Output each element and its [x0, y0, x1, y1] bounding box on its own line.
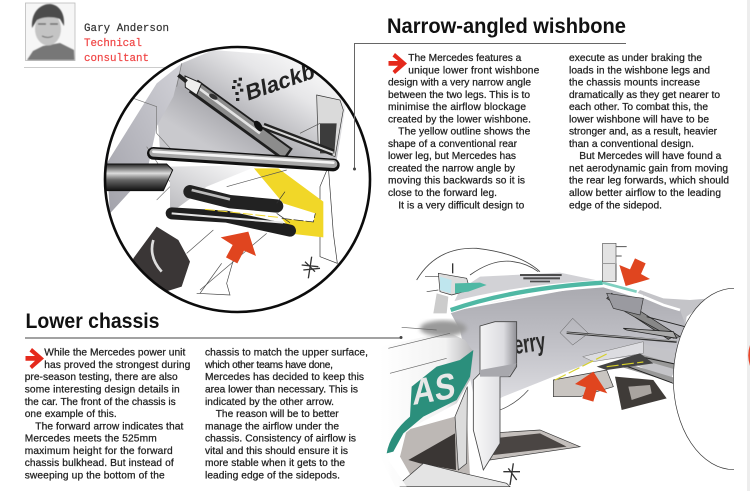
- text: wishbone article: execute as under braking the: [569, 53, 702, 64]
- text: wishbone article: created by the lower wishbone.: [388, 114, 531, 125]
- sponsor: erry: [512, 326, 548, 360]
- text: lower chassis article: Mercedes meets the 525mm: [25, 434, 157, 445]
- circular wishbone detail illustration: [100, 44, 371, 312]
- red arrow: [221, 232, 256, 263]
- text: wishbone article: the rear leg forwards, which should: [569, 176, 729, 187]
- text: lower chassis article: chassis bulkhead. But instead of: [25, 458, 174, 469]
- text: wishbone article: lower wishbone will have to be: [569, 114, 709, 125]
- cylinder: [100, 164, 173, 191]
- text: wishbone article: unique lower front wishbone: [408, 65, 540, 76]
- icon: red arrow: [26, 348, 44, 369]
- floor panel outline: [583, 342, 643, 362]
- text: wishbone article: between the two legs. This is to: [388, 90, 530, 101]
- text: lower chassis article: leading edge of the sidepods.: [205, 470, 340, 481]
- text: wishbone article: edge of the sidepod.: [569, 200, 662, 211]
- signature: [503, 463, 520, 485]
- text: wishbone article: than a conventional design.: [569, 139, 694, 150]
- upper wishbone legs: [263, 126, 333, 153]
- text: lower chassis article: which other teams have done,: [204, 360, 333, 371]
- heading: Narrow-angled wishbone: Narrow-angled wishbone: [387, 15, 626, 38]
- yellow outline shape: [254, 168, 323, 237]
- horizontal upper tube: [153, 153, 333, 165]
- text: lower chassis article: sweeping up the bottom of the: [25, 470, 165, 481]
- text: wishbone article: allow better airflow to the leading: [569, 188, 721, 199]
- text: lower chassis article: has proved the strongest during: [44, 360, 191, 371]
- chassis panels: [157, 50, 347, 160]
- text: wishbone article: the chassis mounts increase: [569, 78, 700, 88]
- thin linkage lines: [187, 123, 320, 290]
- tall vent / marker: [603, 243, 616, 282]
- text: wishbone article: loads in the wishbone legs and: [569, 65, 710, 76]
- text: lower chassis article: the car. The front of the chassis is: [25, 397, 176, 408]
- text: wishbone article: But Mercedes will have found a: [579, 151, 722, 162]
- text: lower chassis article: some interesting design details in: [25, 384, 180, 396]
- text: lower chassis article: manage the airflow under the: [205, 421, 339, 432]
- turning vane: [473, 322, 517, 470]
- sponsor logo: Blackberry: [244, 44, 356, 106]
- top surface: [450, 273, 603, 310]
- teal stripe: [448, 280, 643, 313]
- text: lower chassis article: maximum height for the forward: [25, 446, 173, 457]
- car front illustration: [380, 243, 750, 487]
- text: lower chassis article: Mercedes has decided to keep this: [205, 372, 364, 383]
- signature: [302, 257, 320, 278]
- connector: chassis heading: [25, 336, 402, 339]
- teal nose panel: [387, 350, 473, 453]
- nose: [380, 332, 473, 487]
- icon: red arrow: [388, 53, 407, 74]
- text: wishbone article: each other. To combat this, the: [569, 102, 708, 113]
- text: lower chassis article: vital and this should ensure it is: [205, 446, 348, 457]
- text: wishbone article: stronger and, as a result, heavier: [569, 127, 718, 138]
- author name: [84, 23, 169, 65]
- floor section: [553, 370, 613, 397]
- connector: wishbone heading: [353, 44, 626, 170]
- dark vane: [133, 226, 190, 291]
- heading: Lower chassis: Lower chassis: [26, 310, 160, 333]
- text: wishbone article: It is a very difficult design to: [398, 200, 525, 211]
- text: wishbone article: dramatically as they get nearer to: [569, 90, 720, 101]
- red arrows: [619, 258, 650, 286]
- text: wishbone article: [388, 53, 729, 211]
- text: lower chassis article: chassis to match the upper surface,: [205, 348, 368, 359]
- upright: [317, 95, 343, 157]
- author name: consultant: [84, 53, 149, 65]
- nose sponsor: AS: [413, 364, 455, 413]
- text: wishbone article: net aerodynamic gain from moving: [569, 164, 728, 174]
- mirror and camera: [438, 273, 470, 295]
- text: wishbone article: minimise the airflow blockage: [388, 102, 526, 113]
- text: lower chassis article: The forward arrow indicates that: [35, 421, 183, 432]
- text: wishbone article: created the narrow angle by: [388, 164, 516, 174]
- text: wishbone article: close to the forward leg.: [388, 188, 497, 199]
- lower wishbone legs: [190, 192, 277, 206]
- chassis body: [450, 283, 685, 410]
- text: wishbone article: lower leg, but Mercedes has: [388, 151, 516, 162]
- text: wishbone article: The Mercedes features a: [408, 53, 522, 64]
- text: lower chassis article: [25, 348, 368, 481]
- page edge strip: [747, 0, 750, 491]
- text: lower chassis article: The reason will be to better: [216, 409, 339, 420]
- author name: Technical: [84, 38, 142, 50]
- cockpit lines: [417, 248, 540, 280]
- text: wishbone article: shape of a conventional rear: [388, 139, 518, 150]
- suspension arms: [607, 293, 673, 339]
- front tyre outline: [673, 288, 750, 470]
- text: lower chassis article: more stable when it gets to the: [205, 458, 345, 469]
- text: lower chassis article: pre-season testing, there are also: [25, 372, 178, 383]
- author name: Gary Anderson: [84, 23, 169, 35]
- text: lower chassis article: While the Mercedes power unit: [44, 348, 185, 359]
- rear body: [607, 290, 710, 382]
- text: wishbone article: design with a very narrow angle: [388, 78, 531, 88]
- author photo: [26, 3, 75, 60]
- text: lower chassis article: indicated by the other arrow.: [205, 397, 334, 408]
- text: lower chassis article: area lower than necessary. This is: [205, 384, 358, 396]
- text: lower chassis article: chassis. Consistency of airflow is: [205, 434, 356, 445]
- text: wishbone article: The yellow outline shows the: [398, 127, 531, 138]
- lower nose wing: [487, 430, 580, 460]
- text: wishbone article: moving this backwards so it is: [388, 176, 525, 187]
- text: lower chassis article: one example of this.: [25, 409, 117, 420]
